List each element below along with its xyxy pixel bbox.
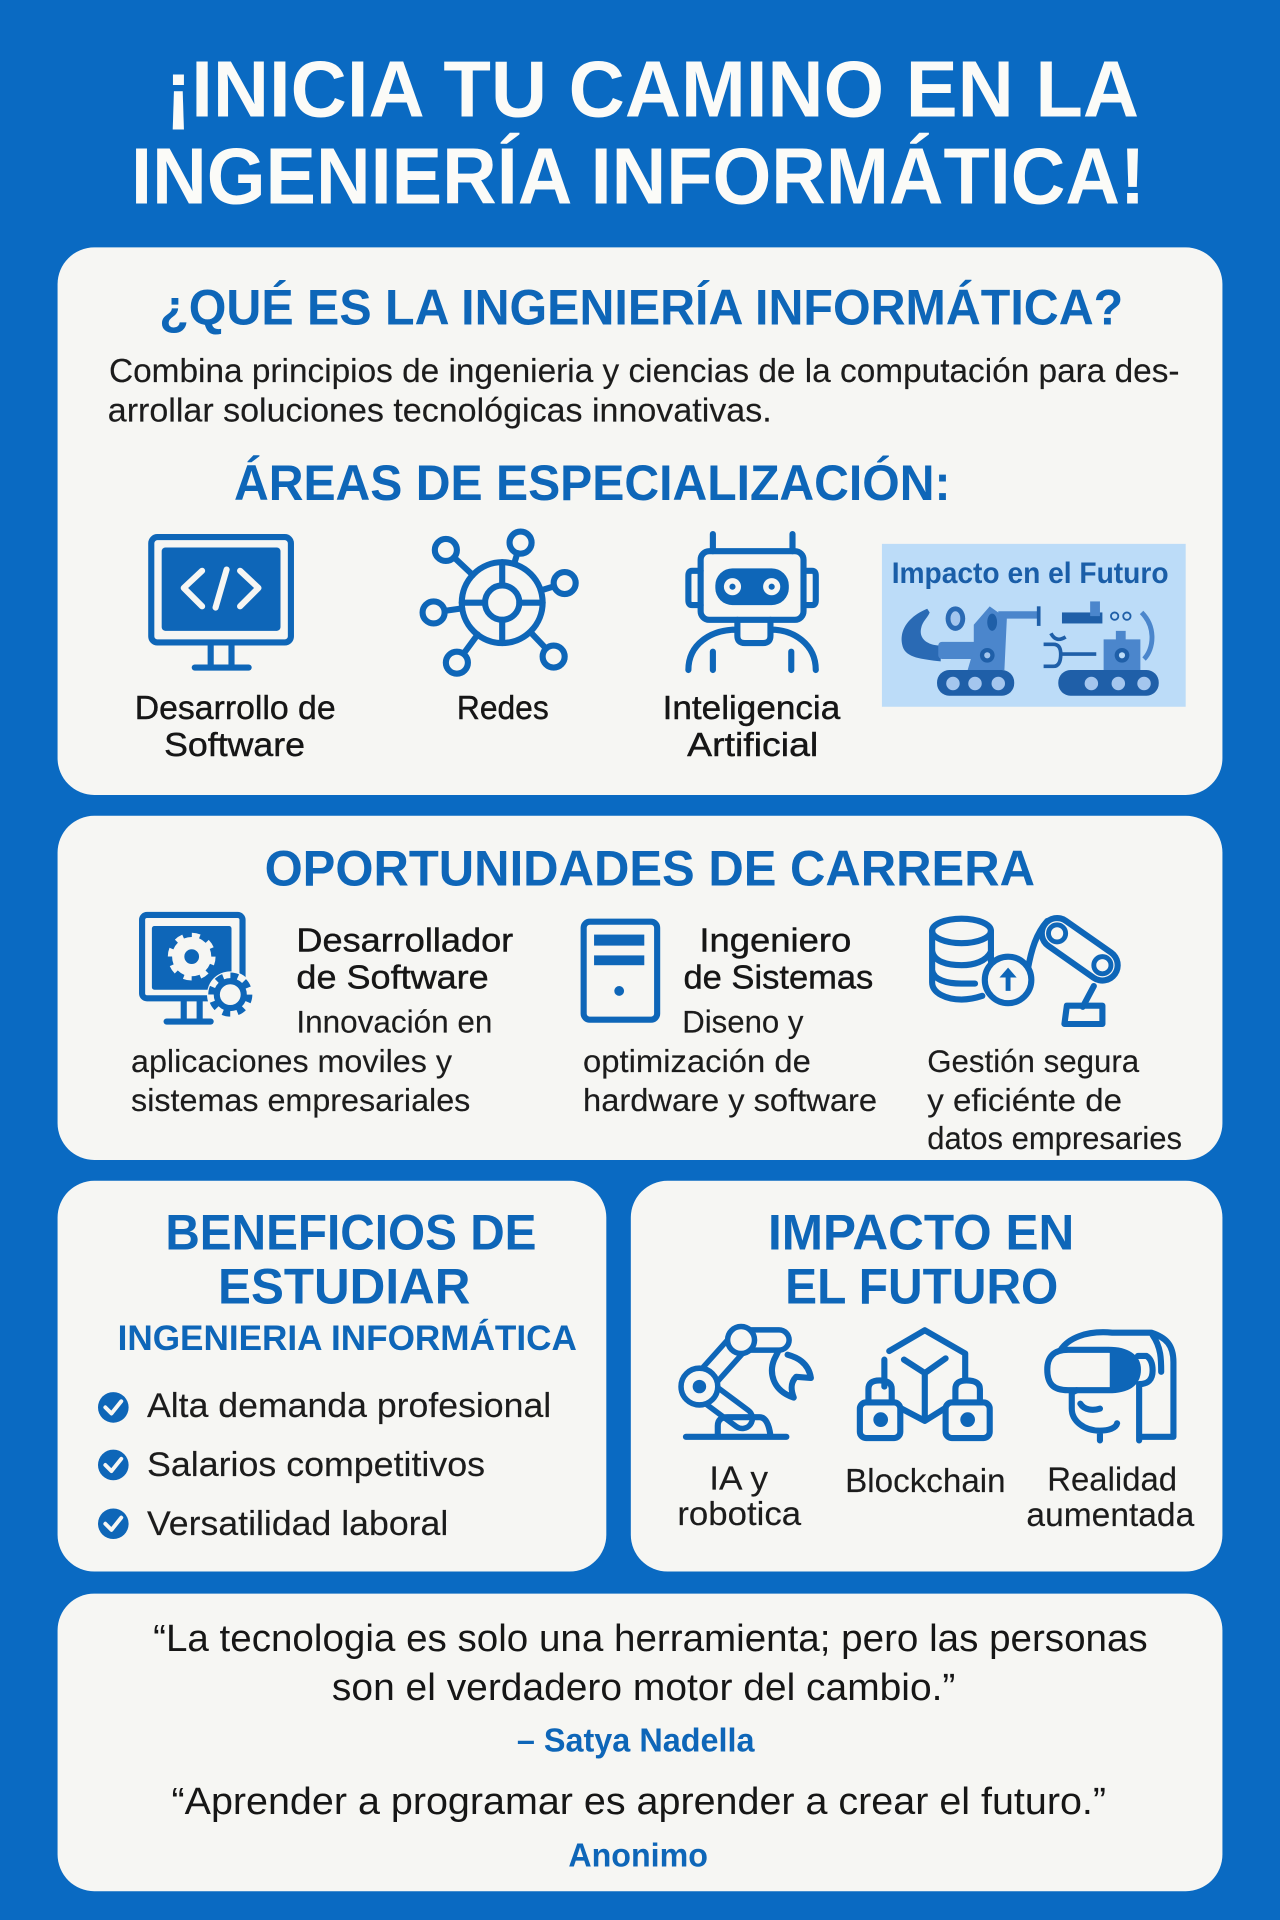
icon: brazo robótico xyxy=(681,1327,811,1437)
panel: citas xyxy=(58,1594,1222,1891)
icon: robot xyxy=(688,534,816,670)
text block: definición xyxy=(108,353,1180,429)
heading: áreas de especialización: ÁREAS DE ESPECIALIZACIÓN: xyxy=(234,455,951,511)
icon: red de nodos xyxy=(423,532,576,674)
title xyxy=(131,44,1145,220)
title: INGENIERÍA INFORMÁTICA! xyxy=(131,131,1145,220)
label: inteligencia artificial xyxy=(663,690,841,764)
text block: definición: arrollar soluciones tecnológicas innovativas. xyxy=(108,392,772,429)
text block: ingeniero de sistemas: de Sistemas xyxy=(683,959,873,996)
text block: ingeniero de sistemas: Diseno y xyxy=(682,1004,804,1040)
heading: qué es: ¿QUÉ ES LA INGENIERÍA INFORMÁTICA? xyxy=(159,280,1123,336)
panel: oportunidades de carrera xyxy=(58,816,1222,1160)
heading: beneficios de estudiar: ESTUDIAR xyxy=(218,1258,470,1314)
heading: beneficios de estudiar xyxy=(118,1204,577,1358)
heading: oportunidades de carrera: OPORTUNIDADES DE CARRERA xyxy=(265,841,1035,897)
label: ia y robótica xyxy=(677,1460,802,1533)
heading: beneficios de estudiar: BENEFICIOS DE xyxy=(165,1204,536,1260)
text block: ingeniero de sistemas: hardware y software xyxy=(583,1082,877,1118)
icon: monitor con engranajes xyxy=(142,915,254,1022)
panel: beneficios xyxy=(58,1181,606,1572)
text block: desarrollador de software: de Software xyxy=(296,959,489,996)
label: desarrollo de software xyxy=(135,690,336,764)
quote: tecnología: “La tecnologia es solo una herramienta; pero las personas xyxy=(153,1618,1148,1660)
attribution: anónimo: Anonimo xyxy=(568,1838,708,1875)
label: inteligencia artificial: Inteligencia xyxy=(663,690,841,727)
list item: alta demanda: Alta demanda profesional xyxy=(147,1387,551,1425)
text block: desarrollador de software: aplicaciones moviles y xyxy=(131,1043,452,1079)
heading: impacto en el futuro: IMPACTO EN xyxy=(768,1204,1074,1260)
label: inteligencia artificial: Artificial xyxy=(687,727,818,764)
icon: robot izquierdo xyxy=(902,606,1039,696)
text block: desarrollador de software: Innovación en xyxy=(296,1004,492,1040)
heading: beneficios de estudiar: INGENIERIA INFORMÁTICA xyxy=(118,1318,577,1358)
label: redes: Redes xyxy=(457,690,549,727)
icon: blockchain xyxy=(860,1330,990,1438)
icon: realidad aumentada xyxy=(1047,1332,1173,1440)
attribution: satya nadella: – Satya Nadella xyxy=(517,1723,755,1760)
panel: qué es la ingeniería informática xyxy=(58,247,1222,795)
quote: tecnología: son el verdadero motor del cambio.” xyxy=(332,1667,955,1709)
label: desarrollo de software: Software xyxy=(164,727,305,764)
title: ¡INICIA TU CAMINO EN LA xyxy=(165,44,1139,133)
text block: desarrollador de software xyxy=(131,923,513,1118)
label: desarrollo de software: Desarrollo de xyxy=(135,690,336,727)
callout: impacto en el futuro: Impacto en el Futuro xyxy=(892,557,1169,590)
icon: monitor con código xyxy=(151,537,291,668)
heading: impacto en el futuro: EL FUTURO xyxy=(785,1258,1058,1314)
label: ia y robótica: IA y xyxy=(709,1460,768,1497)
text block: definición: Combina principios de ingenieria y ciencias de la computación para des- xyxy=(109,353,1180,390)
text block: gestión de datos: y eficiénte de xyxy=(927,1082,1122,1118)
heading: impacto en el futuro xyxy=(768,1204,1074,1314)
label: realidad aumentada xyxy=(1026,1462,1195,1534)
list item: versatilidad: Versatilidad laboral xyxy=(147,1505,448,1543)
text block: gestión de datos xyxy=(927,1043,1182,1156)
text block: ingeniero de sistemas: Ingeniero xyxy=(699,923,851,960)
text block: gestión de datos: datos empresaries xyxy=(927,1120,1182,1156)
text block: ingeniero de sistemas: optimización de xyxy=(583,1043,811,1079)
quote: programar: “Aprender a programar es aprender a crear el futuro.” xyxy=(171,1781,1106,1823)
icon: base de datos y brazo robótico xyxy=(932,919,1111,1024)
label: realidad aumentada: aumentada xyxy=(1026,1497,1195,1534)
list item: salarios: Salarios competitivos xyxy=(147,1446,485,1484)
text block: desarrollador de software: Desarrollador xyxy=(296,923,513,960)
text block: ingeniero de sistemas xyxy=(583,923,877,1118)
panel: impacto en el futuro xyxy=(631,1181,1222,1572)
icon: robot derecho xyxy=(1039,601,1159,696)
label: blockchain: Blockchain xyxy=(845,1463,1006,1500)
text block: gestión de datos: Gestión segura xyxy=(927,1043,1139,1079)
text block: desarrollador de software: sistemas empresariales xyxy=(131,1082,470,1118)
icon: servidor xyxy=(584,922,657,1020)
quote: tecnología xyxy=(153,1618,1148,1709)
label: ia y robótica: robotica xyxy=(677,1496,802,1533)
callout: impacto en el futuro xyxy=(882,544,1186,707)
label: realidad aumentada: Realidad xyxy=(1047,1462,1177,1499)
